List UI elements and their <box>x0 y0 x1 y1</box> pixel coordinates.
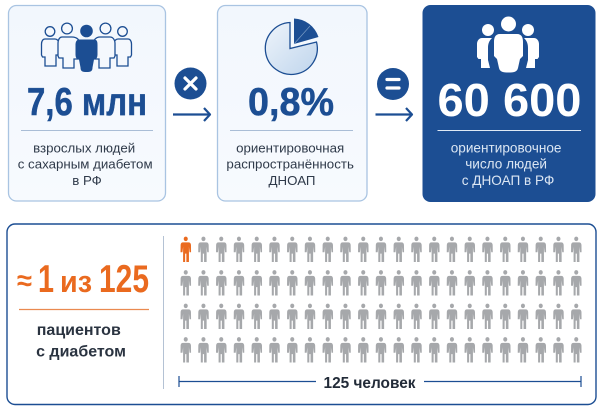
icon: group of people <box>42 23 132 72</box>
description text: с диабетом <box>36 344 126 360</box>
description text: ДНОАП <box>269 173 315 188</box>
label: 125 people: 125 человек <box>324 375 416 392</box>
value: 7,6 млн: 7,6 млн <box>27 81 147 124</box>
icon: pie chart <box>265 18 318 74</box>
description text: число людей <box>465 157 547 172</box>
description text: распространённость <box>226 157 354 172</box>
panel: 1 in 125 <box>7 224 596 404</box>
arrow: to result <box>376 108 412 121</box>
panel: prevalence <box>218 6 367 201</box>
panel: result <box>422 5 596 202</box>
value: approx 1 in 125: ≈ <box>17 265 32 296</box>
value: 60 600: 60 600 <box>438 74 582 126</box>
description text: в РФ <box>72 173 102 188</box>
description text: с ДНОАП в РФ <box>462 173 554 188</box>
value: 0,8%: 0,8% <box>248 81 334 124</box>
value: approx 1 in 125: 125 <box>99 258 149 301</box>
icon: equals operator <box>377 68 409 100</box>
pictogram: 92 people icons <box>181 237 582 362</box>
value: approx 1 in 125: из <box>60 264 92 299</box>
description text: взрослых людей <box>33 141 135 156</box>
description text: ориентировочное <box>451 141 561 156</box>
panel: adults with diabetes <box>8 6 166 201</box>
arrow: to prevalence <box>173 108 210 121</box>
bracket: 125 people span <box>179 376 581 387</box>
value: approx 1 in 125 <box>17 258 149 301</box>
value: approx 1 in 125: 1 <box>38 258 54 301</box>
description text: ориентировочная <box>236 141 344 156</box>
description text: с сахарным диабетом <box>18 157 153 172</box>
description text: пациентов <box>37 322 121 339</box>
icon: three people <box>477 16 539 72</box>
icon: multiply operator <box>174 68 206 100</box>
